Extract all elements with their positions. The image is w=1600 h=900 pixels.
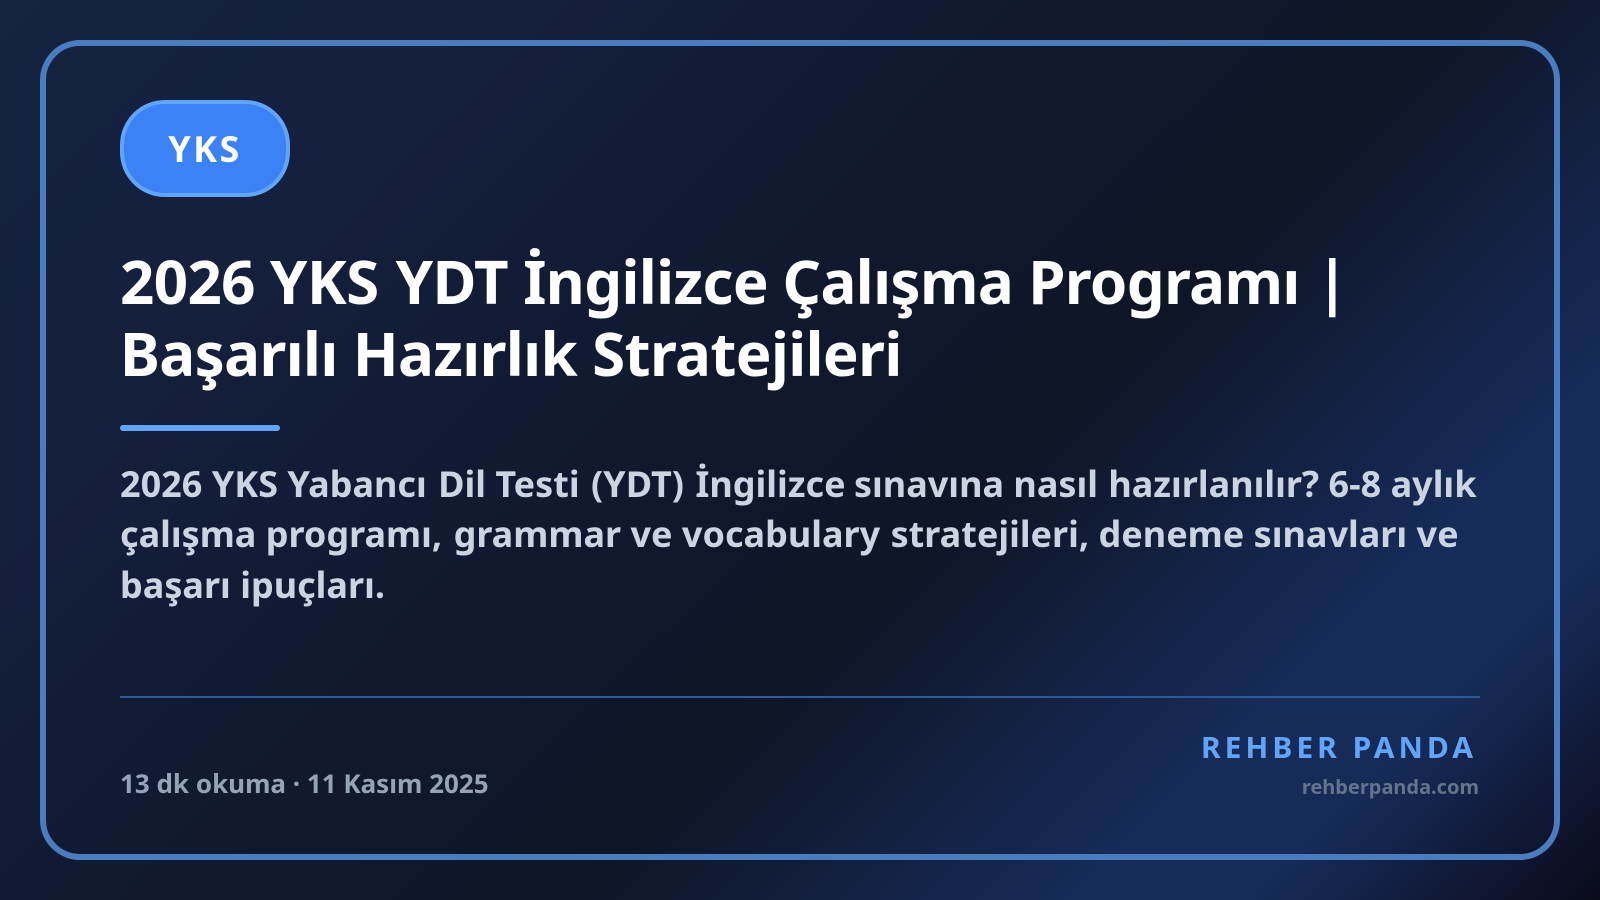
description: ve [1417, 509, 1459, 558]
title accent line [120, 425, 280, 431]
reading time and date: 13 dk okuma · 11 Kasım 2025 [120, 765, 489, 801]
description: başarı [120, 560, 231, 609]
title [120, 240, 1348, 394]
description: sınavına [854, 459, 1004, 508]
title: Programı [1028, 240, 1300, 322]
description: ipuçları. [240, 560, 385, 609]
title: Hazırlık [353, 312, 577, 394]
description: vocabulary [682, 509, 880, 558]
description: Dil [438, 459, 486, 508]
description: sınavları [1254, 509, 1407, 558]
title: Çalışma [783, 240, 1013, 322]
badge: YKS [120, 100, 290, 197]
brand name: REHBER PANDA [1201, 726, 1477, 767]
title: YDT [396, 240, 508, 322]
description: Testi [495, 459, 580, 508]
description: stratejileri, [891, 509, 1089, 558]
description: programı, [266, 509, 442, 558]
description: ve [630, 509, 673, 558]
description: 2026 [120, 459, 202, 508]
badge: YKS: YKS [168, 124, 242, 173]
description: Yabancı [287, 459, 427, 508]
description: aylık [1391, 459, 1477, 508]
description: nasıl [1013, 459, 1098, 508]
footer divider [120, 696, 1480, 698]
website: rehberpanda.com [1302, 773, 1479, 800]
title: | [1316, 240, 1348, 322]
title: 2026 [120, 240, 255, 322]
title: İngilizce [523, 240, 768, 322]
description: YKS [212, 459, 278, 508]
title: Stratejileri [592, 312, 902, 394]
description: İngilizce [695, 459, 846, 508]
description [120, 459, 1477, 609]
description: çalışma [120, 509, 256, 558]
description: hazırlanılır? [1108, 459, 1319, 508]
title: YKS [270, 240, 379, 322]
description: grammar [454, 509, 621, 558]
description: 6-8 [1328, 459, 1381, 508]
description: (YDT) [591, 459, 684, 508]
title: Başarılı [120, 312, 338, 394]
description: deneme [1099, 509, 1244, 558]
